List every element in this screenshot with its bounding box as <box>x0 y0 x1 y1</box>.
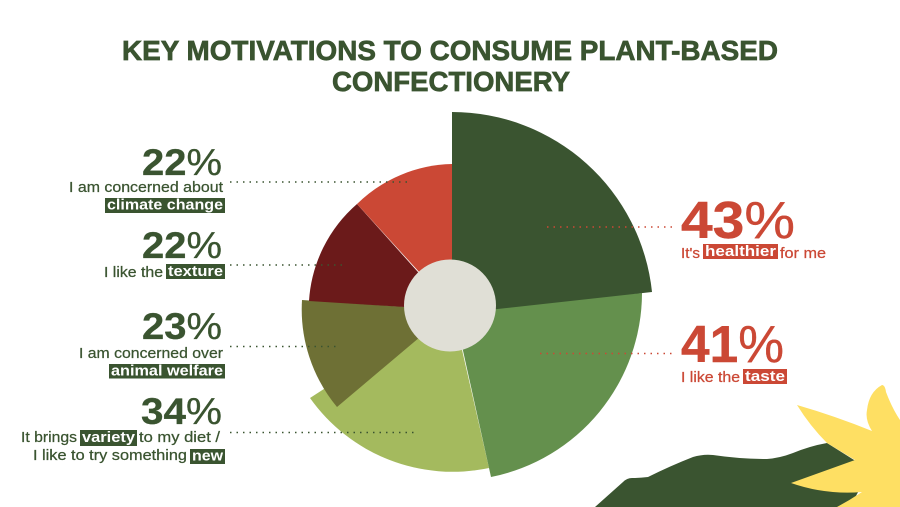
label: animal welfare 23%: I am concerned over <box>79 346 223 362</box>
title: KEY MOTIVATIONS TO CONSUME PLANT-BASED <box>122 35 778 66</box>
slice: animal welfare 23% <box>302 300 452 407</box>
label: climate change 22% <box>69 142 225 214</box>
label: variety 34%: to my diet / <box>139 430 221 446</box>
label: animal welfare 23% <box>79 306 225 380</box>
label: taste 41%: taste <box>745 369 785 385</box>
slice: climate change 22% <box>357 164 452 308</box>
label: variety 34%: It brings <box>21 430 77 446</box>
label: taste 41%: I like the <box>681 370 740 386</box>
label: healthier 43% <box>681 192 826 262</box>
slice: taste 41% <box>454 293 642 477</box>
label: variety 34%: 34% <box>141 391 222 432</box>
label: texture 22%: I like the <box>104 265 163 281</box>
label: variety 34%: variety <box>82 430 135 446</box>
slice: variety 34% <box>310 306 489 472</box>
label: healthier 43%: It's <box>681 246 700 262</box>
leaf: dark green <box>595 443 870 507</box>
label: texture 22%: texture <box>168 264 223 280</box>
label: taste 41%: 41% <box>681 316 784 374</box>
centre circle <box>404 260 496 352</box>
label: animal welfare 23%: animal welfare <box>111 364 223 380</box>
label: animal welfare 23%: 23% <box>142 306 222 347</box>
label: variety 34% <box>21 391 225 464</box>
label: climate change 22%: 22% <box>142 142 222 183</box>
radial pie chart <box>302 112 652 477</box>
label: healthier 43%: for me <box>780 246 826 262</box>
slice: healthier 43% <box>452 112 652 314</box>
decorative leaves <box>595 385 900 507</box>
title: CONFECTIONERY <box>332 66 570 97</box>
label: healthier 43%: healthier <box>705 244 776 260</box>
label: healthier 43%: 43% <box>681 192 795 250</box>
title <box>122 35 778 97</box>
slice: texture 22% <box>309 204 452 310</box>
label: variety 34%: new <box>192 448 224 464</box>
leader lines <box>230 182 672 432</box>
label: climate change 22%: climate change <box>107 198 223 214</box>
label: texture 22% <box>104 225 225 281</box>
leaf: yellow <box>791 385 900 507</box>
label: variety 34%: I like to try something <box>33 448 187 464</box>
label: texture 22%: 22% <box>142 225 222 266</box>
label: climate change 22%: I am concerned about <box>69 180 223 196</box>
